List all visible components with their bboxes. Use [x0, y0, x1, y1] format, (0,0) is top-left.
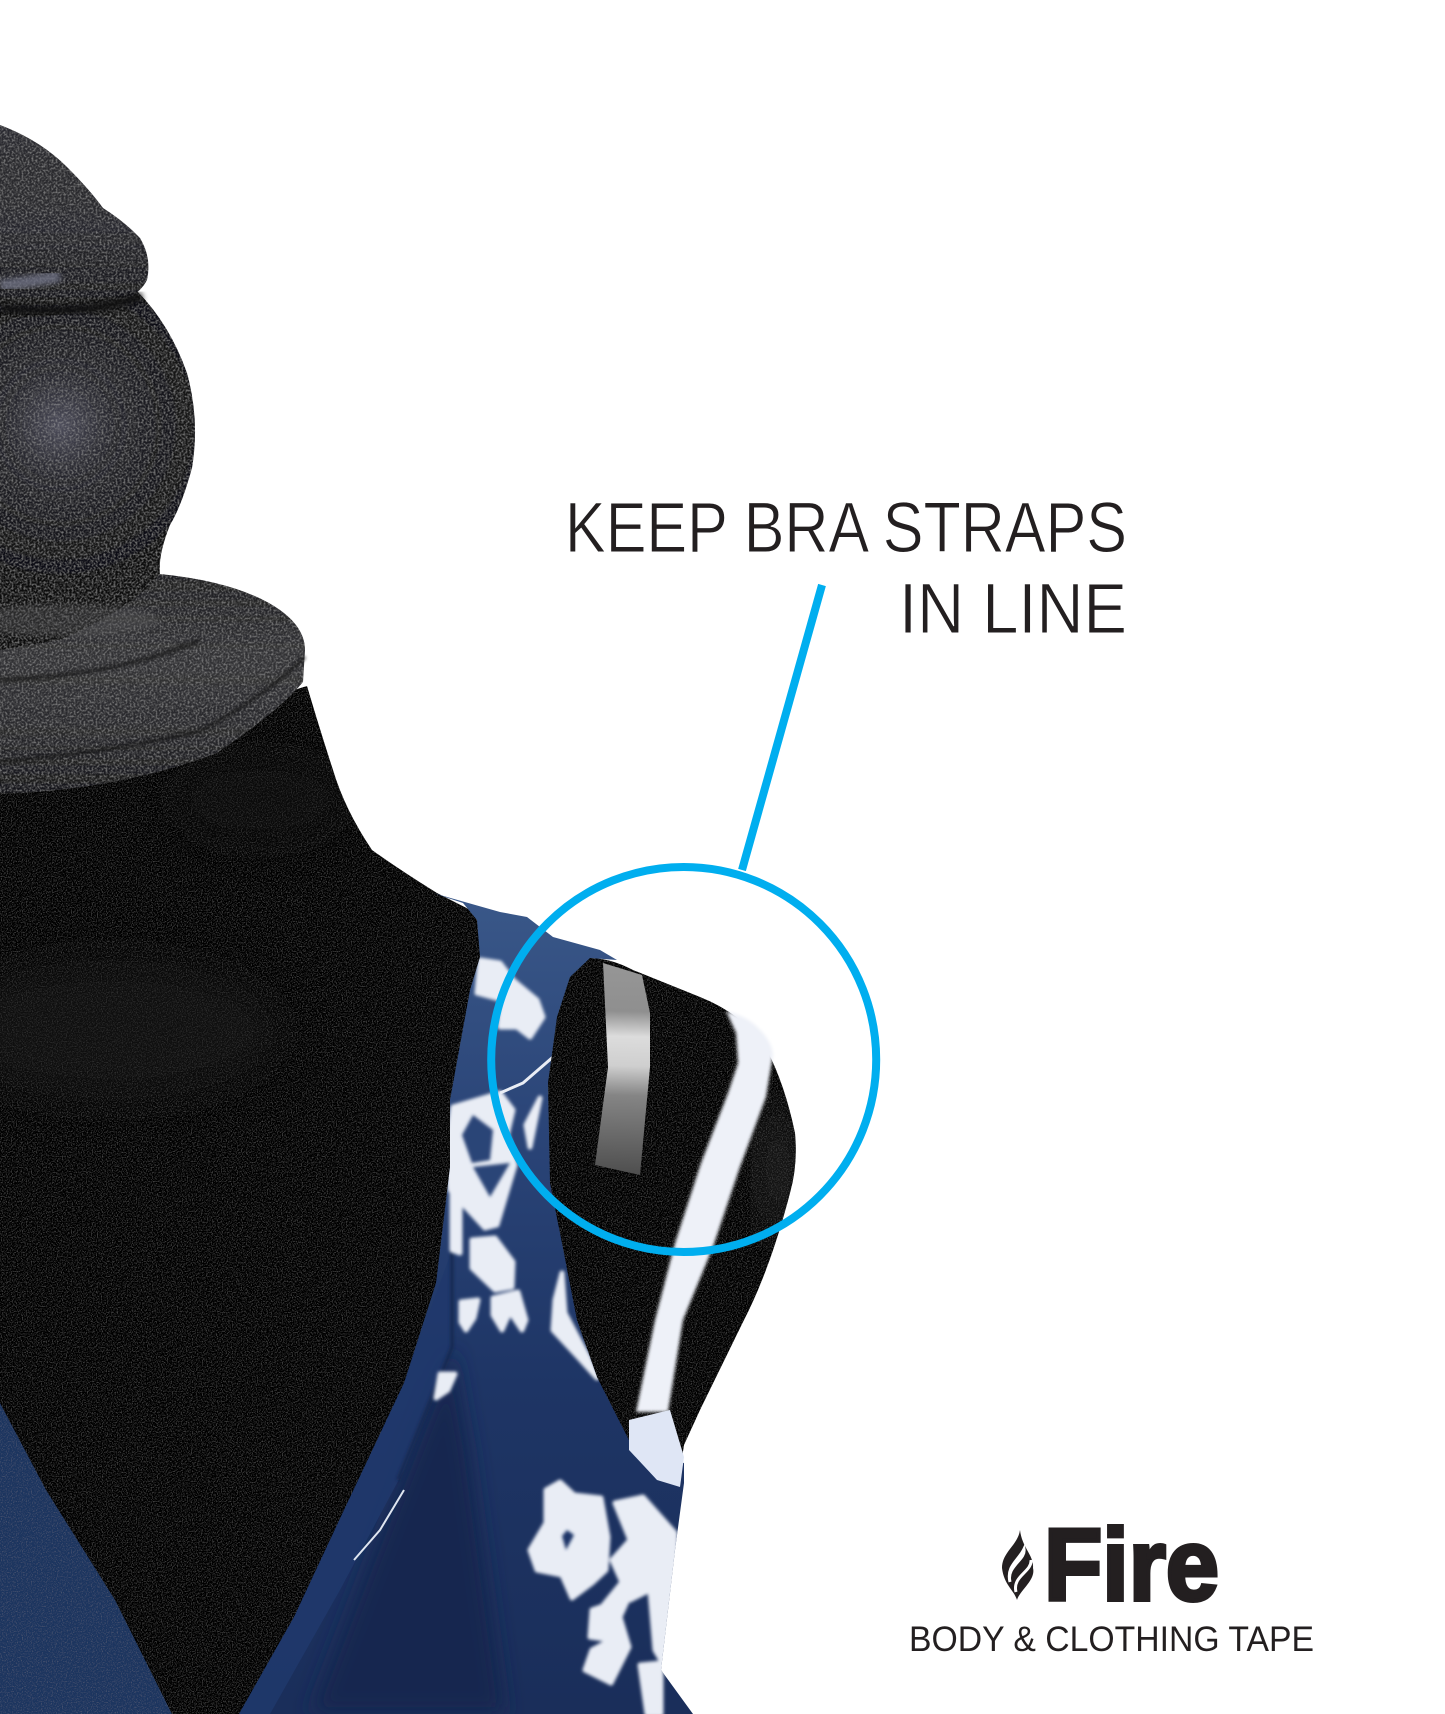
- dress strap and bodice: [235, 893, 693, 1714]
- mannequin head finial: [0, 125, 305, 794]
- icon: flame: [1002, 1530, 1033, 1600]
- head highlights: [0, 276, 305, 762]
- clear tape strip: [595, 963, 650, 1175]
- neck base disc: [0, 574, 305, 794]
- heading: KEEP BRA STRAPS: [565, 489, 1127, 568]
- logo: [909, 1508, 1314, 1659]
- ball: [0, 280, 195, 660]
- wordmark: Fire: [1044, 1508, 1219, 1622]
- callout leader line: [742, 585, 822, 870]
- velvet torso: [0, 680, 800, 1714]
- white floral print: [436, 960, 675, 1714]
- white bra strap: [636, 1011, 773, 1412]
- ring cap: [0, 125, 148, 318]
- tagline: BODY & CLOTHING TAPE: [909, 1620, 1314, 1659]
- heading: [565, 489, 1127, 649]
- callout circle: [491, 867, 876, 1252]
- folds and flowers: [235, 960, 675, 1714]
- thin print lines: [500, 1057, 553, 1093]
- dress left lapel: [0, 1403, 172, 1714]
- blue patches in flowers: [462, 1115, 574, 1550]
- heading: IN LINE: [899, 570, 1127, 649]
- mannequin photo: [0, 125, 800, 1714]
- fabric: [239, 893, 693, 1714]
- strap clasp: [629, 1410, 684, 1487]
